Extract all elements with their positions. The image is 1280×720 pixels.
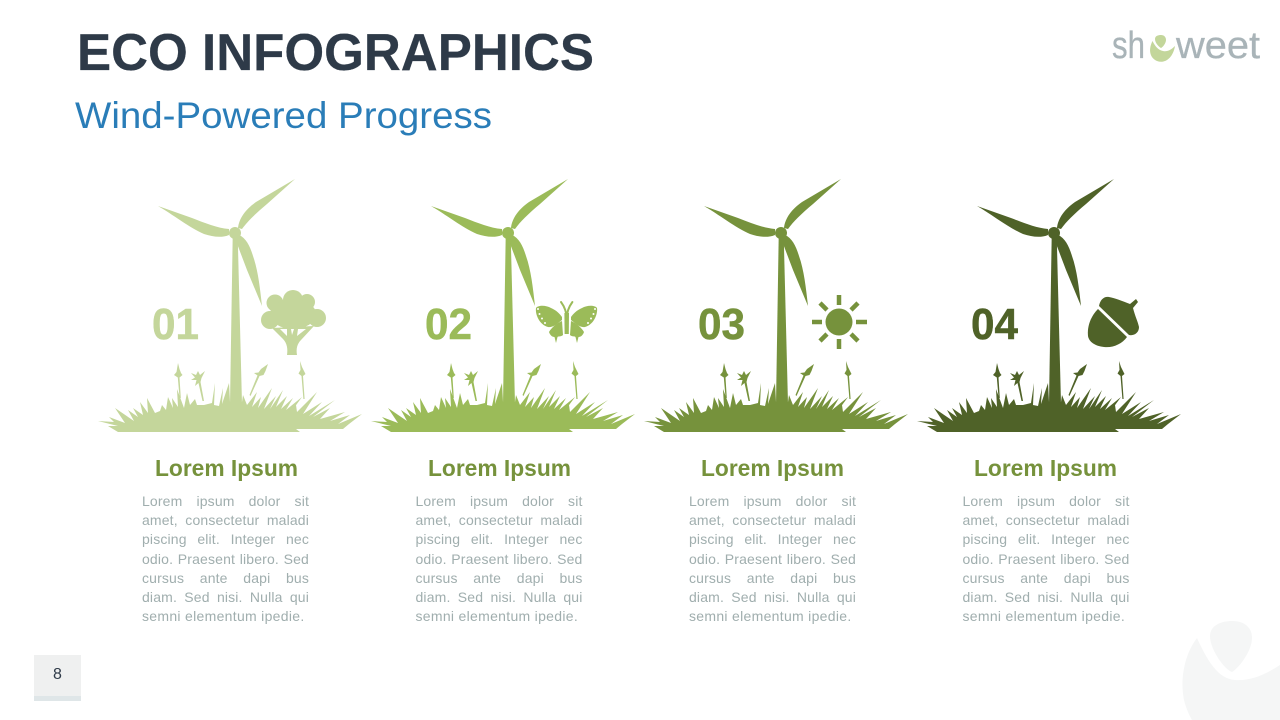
text block 1: Lorem ipsum dolor sit — [142, 493, 309, 509]
showeet logo: sh — [1112, 25, 1145, 67]
icon: butterfly — [536, 302, 597, 343]
text block 2: piscing elit. Integer nec — [416, 531, 582, 547]
text block 3: Lorem ipsum dolor sit — [689, 493, 856, 509]
turbine 3 — [644, 179, 908, 432]
showeet logo: weet — [1175, 25, 1260, 67]
watermark logo — [1183, 621, 1280, 720]
heading 3: Lorem Ipsum — [701, 455, 844, 481]
text block 2 — [416, 493, 582, 624]
text block 1: odio. Praesent libero. Sed — [142, 551, 309, 567]
turbine 4 — [917, 179, 1181, 432]
text block 1: diam. Sed nisi. Nulla qui — [142, 589, 309, 605]
text block 1 — [142, 493, 309, 624]
text block 2: semni elementum ipedie. — [416, 608, 578, 624]
text block 4: Lorem ipsum dolor sit — [962, 493, 1130, 509]
subtitle: Wind-Powered Progress — [75, 94, 492, 136]
text block 2: odio. Praesent libero. Sed — [416, 551, 582, 567]
text block 4: semni elementum ipedie. — [962, 608, 1125, 624]
text block 3: semni elementum ipedie. — [689, 608, 852, 624]
text block 4: piscing elit. Integer nec — [962, 531, 1130, 547]
icon: acorn — [1088, 297, 1139, 347]
text block 1: piscing elit. Integer nec — [142, 531, 309, 547]
text block 4: odio. Praesent libero. Sed — [962, 551, 1130, 567]
text block 2: diam. Sed nisi. Nulla qui — [416, 589, 582, 605]
icon: tree — [261, 290, 326, 355]
heading 4: Lorem Ipsum — [974, 455, 1117, 481]
text block 3: cursus ante dapi bus — [689, 570, 856, 586]
heading 2: Lorem Ipsum — [428, 455, 571, 481]
showeet logo — [1112, 25, 1260, 67]
text block 2: amet, consectetur maladi — [416, 512, 582, 528]
number 02: 02 — [425, 300, 472, 349]
text block 2: Lorem ipsum dolor sit — [416, 493, 582, 509]
number 03: 03 — [698, 300, 745, 349]
icon: sun — [812, 295, 867, 349]
text block 1: cursus ante dapi bus — [142, 570, 309, 586]
page number box: 8 — [53, 666, 62, 683]
page number box — [34, 655, 81, 701]
text block 3: odio. Praesent libero. Sed — [689, 551, 856, 567]
number 01: 01 — [152, 300, 199, 349]
text block 1: amet, consectetur maladi — [142, 512, 309, 528]
heading 1: Lorem Ipsum — [155, 455, 298, 481]
title: ECO INFOGRAPHICS — [77, 24, 594, 82]
turbine 1 — [98, 179, 362, 432]
text block 4: diam. Sed nisi. Nulla qui — [962, 589, 1130, 605]
text block 4: cursus ante dapi bus — [962, 570, 1130, 586]
text block 3: diam. Sed nisi. Nulla qui — [689, 589, 856, 605]
text block 4 — [962, 493, 1130, 624]
text block 2: cursus ante dapi bus — [416, 570, 582, 586]
turbine 2 — [371, 179, 635, 432]
text block 1: semni elementum ipedie. — [142, 608, 305, 624]
text block 3: amet, consectetur maladi — [689, 512, 856, 528]
text block 4: amet, consectetur maladi — [962, 512, 1130, 528]
text block 3: piscing elit. Integer nec — [689, 531, 856, 547]
number 04: 04 — [971, 300, 1018, 349]
text block 3 — [689, 493, 856, 624]
